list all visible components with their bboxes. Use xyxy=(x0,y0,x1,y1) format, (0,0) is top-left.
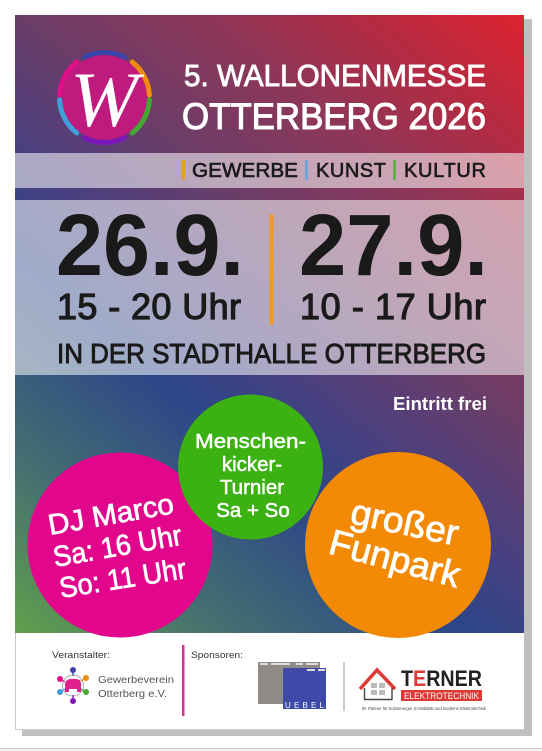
date band xyxy=(15,197,524,375)
subtitle band: GEWERBE xyxy=(192,160,298,182)
circle: Menschenkicker: Sa + So xyxy=(216,499,290,522)
subtitle band: KULTUR xyxy=(404,160,486,182)
circle: DJ Marco: Sa: 16 Uhr xyxy=(51,520,185,574)
date: Sunday: 27.9. xyxy=(299,197,488,294)
logo: Terner Elektrotechnik xyxy=(360,666,487,711)
icon: Gewerbeverein logo xyxy=(57,667,89,704)
circle: Funpark xyxy=(305,452,491,638)
logo: Terner Elektrotechnik: TERNER xyxy=(401,666,482,691)
subtitle band xyxy=(15,153,524,188)
date separator xyxy=(270,214,274,325)
gradient background xyxy=(15,15,524,633)
circle: DJ Marco: DJ Marco xyxy=(46,488,176,542)
logo: Terner Elektrotechnik: Ihr Partner für Solarenergie, E-Mobilität und moderne Elektrotechnik xyxy=(362,706,487,711)
circle: Menschenkicker: kicker- xyxy=(222,453,282,476)
divider xyxy=(343,662,345,711)
circle: DJ Marco xyxy=(28,452,212,638)
circle: DJ Marco: So: 11 Uhr xyxy=(57,553,189,605)
logo: Uebel xyxy=(258,662,326,710)
date: Saturday: 26.9. xyxy=(56,197,244,294)
hours: Saturday: 15 - 20 Uhr xyxy=(57,286,241,327)
page edge xyxy=(0,748,542,751)
logo: Terner Elektrotechnik: ELEKTROTECHNIK xyxy=(404,691,479,701)
title: OTTERBERG 2026 xyxy=(182,96,486,137)
title: 5. WALLONENMESSE xyxy=(184,58,486,93)
footer panel xyxy=(15,633,524,730)
hours: Sunday: 10 - 17 Uhr xyxy=(300,286,486,327)
organizer label: Veranstalter: xyxy=(52,650,110,661)
circle: Menschenkicker: Turnier xyxy=(220,476,284,499)
title xyxy=(182,58,486,137)
sponsors label: Sponsoren: xyxy=(191,650,243,661)
venue: IN DER STADTHALLE OTTERBERG xyxy=(57,338,486,369)
logo: Uebel: UEBEL xyxy=(285,701,325,710)
circle: Menschenkicker: Menschen- xyxy=(195,430,306,453)
circle: Menschenkicker xyxy=(178,394,323,540)
organizer name: Otterberg e.V. xyxy=(98,688,167,700)
subtitle band: KUNST xyxy=(316,160,386,182)
organizer name: Gewerbeverein xyxy=(98,674,174,686)
free entry note: Eintritt frei xyxy=(393,394,487,414)
circle: Funpark: großer xyxy=(347,491,462,553)
logo: Wallonenmesse xyxy=(60,53,149,143)
circle: Funpark: Funpark xyxy=(325,521,466,596)
logo: Wallonenmesse: W xyxy=(70,56,144,143)
organizer name xyxy=(98,674,174,700)
divider xyxy=(182,645,184,716)
